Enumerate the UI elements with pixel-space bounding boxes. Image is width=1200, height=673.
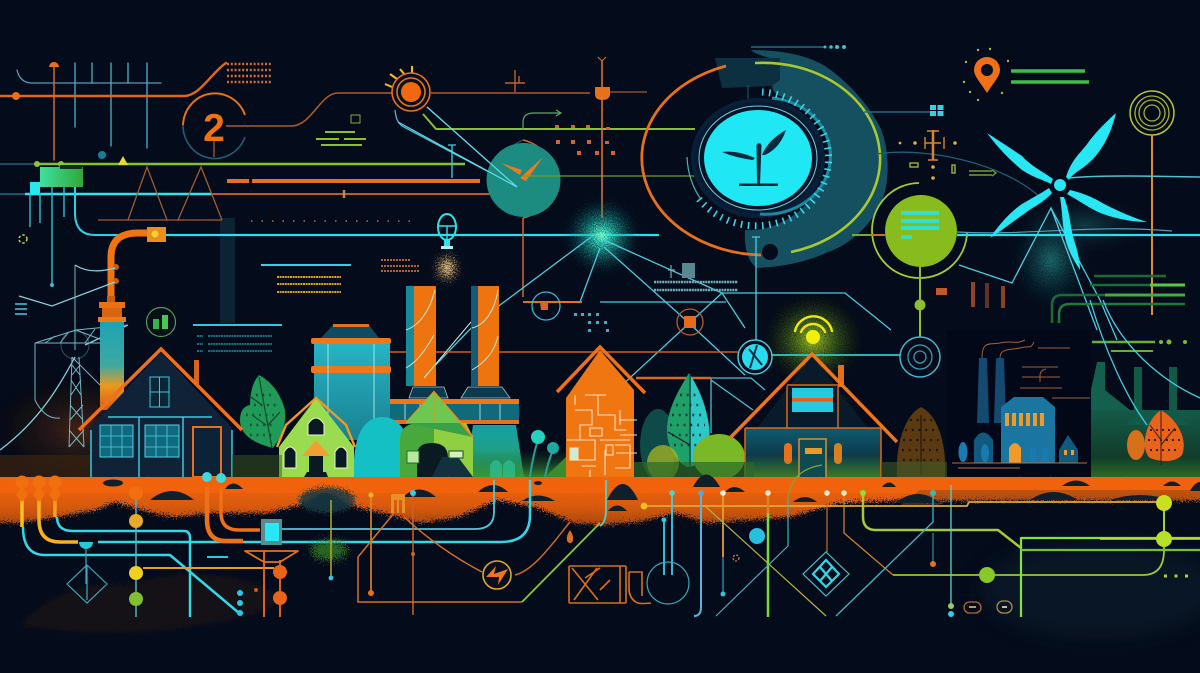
bolt icon: [483, 561, 511, 589]
cross glyph cluster: [910, 130, 996, 176]
orange circuit house: [557, 347, 645, 477]
long orange line: [390, 351, 738, 353]
numeral badge: [183, 93, 245, 159]
flare: [465, 425, 524, 477]
inset silo and small house: [974, 432, 1078, 463]
green glow spot: [311, 540, 347, 560]
green info circle: [852, 183, 967, 337]
small cross marker: [505, 70, 525, 92]
location pin: [963, 48, 1009, 101]
left leaf tree: [240, 375, 285, 448]
green drip at left edge: [600, 480, 606, 526]
tower skirts: [409, 387, 510, 398]
orange signal dots: [555, 125, 615, 155]
underground pipes left: [22, 480, 530, 617]
green tracks right: [1052, 276, 1185, 323]
overhead wires: [0, 265, 128, 450]
wind turbine: [987, 113, 1200, 270]
right tower: [471, 286, 499, 386]
house one: [79, 349, 242, 477]
dial ticks: [687, 92, 830, 226]
cyan switch box: [261, 519, 282, 545]
clock stem line: [522, 218, 524, 297]
sun beams to clock: [395, 107, 695, 187]
small ring glyph: [19, 235, 27, 243]
green building: [400, 392, 473, 477]
bulb: [438, 214, 456, 249]
pill icons: [964, 601, 1012, 613]
underground lines right: [644, 465, 1200, 617]
right scene: [1091, 362, 1200, 477]
inset factory panel: [947, 330, 1091, 476]
scatter dots centre: [574, 313, 609, 332]
crescent dial panel: [715, 50, 888, 268]
left pipe heads: [16, 476, 143, 502]
central spark: [564, 198, 640, 274]
silo: [311, 324, 391, 440]
dotted row: [251, 220, 415, 222]
soil shadow: [299, 487, 355, 513]
orange pipe: [111, 227, 166, 305]
turbine glyph: [722, 130, 786, 186]
diamond window icon: [803, 552, 849, 596]
mounds: [103, 474, 1200, 511]
top-left grid lines: [0, 63, 226, 160]
dotted matrix: [227, 64, 271, 82]
hole in crescent: [762, 244, 778, 260]
dial top dots: [824, 45, 846, 49]
green dash lines: [1092, 340, 1187, 351]
pylon: [35, 265, 128, 447]
text lines left block: [193, 260, 420, 351]
green and cyan bus lines: [0, 145, 519, 198]
orange soil band: [0, 477, 1200, 525]
arrow above clock: [523, 110, 561, 130]
chimney: [98, 296, 126, 410]
connector to sun: [226, 93, 590, 126]
dial disc: [699, 106, 817, 210]
soil lower shade: [900, 490, 1200, 506]
bulb plants: [490, 430, 566, 477]
pipe nodes: [129, 472, 287, 616]
control box with drips: [30, 165, 119, 287]
dial rings: [642, 47, 1040, 255]
factory towers: [406, 286, 510, 398]
green glow strip centre: [440, 450, 570, 477]
pin text lines: [1011, 71, 1089, 82]
orange and cyan ties: [711, 378, 765, 433]
background glows: [0, 195, 1200, 640]
small square and dashes: [316, 115, 366, 145]
orange square node: [677, 309, 703, 335]
orange roofline: [636, 377, 711, 379]
hamburger icon: [15, 304, 27, 314]
inset factory chimneys: [977, 358, 1006, 423]
orange tree: [1127, 410, 1184, 465]
right curving cables: [1090, 300, 1200, 425]
grid icon: [930, 105, 944, 116]
node circles and link: [738, 337, 940, 377]
right status blocks: [936, 282, 1005, 308]
spark rays: [423, 237, 891, 400]
angular cables: [959, 208, 1117, 340]
sun icon: [385, 66, 430, 111]
main cyan line: [166, 234, 659, 236]
battery icon: [569, 566, 651, 604]
mid nodes: [329, 490, 573, 596]
house three: [730, 354, 897, 477]
brown leaf tree: [897, 407, 945, 477]
small ring spot: [733, 555, 739, 561]
inset main building: [1001, 397, 1055, 463]
right line nodes: [641, 490, 1193, 617]
factory bands: [390, 399, 519, 424]
target antenna: [1130, 91, 1174, 315]
orange dome and node: [12, 62, 59, 100]
centre tree group: [640, 373, 745, 481]
cyan line right: [957, 234, 1200, 236]
ground glows: [0, 455, 947, 477]
triangles: [98, 167, 222, 220]
chart icon: [146, 308, 176, 336]
cluster dots: [899, 141, 957, 180]
wifi signal: [795, 316, 832, 344]
gauge circle: [523, 292, 582, 320]
clock: [398, 107, 695, 218]
left tower: [406, 286, 471, 386]
green cottage: [277, 398, 355, 482]
crescent shadow patch: [715, 58, 780, 88]
nodes on green line: [34, 151, 128, 167]
teal valve and diamond: [67, 542, 107, 603]
dome: [354, 417, 408, 477]
vertical mast with shield: [595, 57, 647, 218]
mid underground lines: [331, 495, 600, 615]
numeral badge: 2: [203, 107, 225, 150]
inset ground and trees: [952, 463, 1087, 468]
smoke and wires: [982, 340, 1090, 398]
silver wave right: [957, 229, 1172, 233]
platform structure: [654, 263, 738, 290]
